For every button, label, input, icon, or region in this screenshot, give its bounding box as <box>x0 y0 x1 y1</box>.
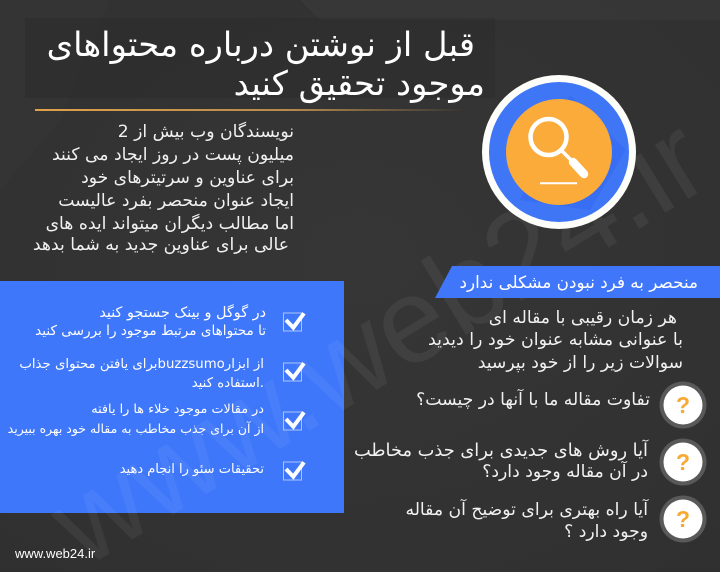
item 3 <box>8 402 306 436</box>
intro question text: هر زمان رقیبی با مقاله ای <box>489 308 677 328</box>
icon: question mark <box>660 382 706 428</box>
intro text: میلیون پست در روز ایجاد می کنند <box>52 145 294 165</box>
banner heading: منحصر به فرد نبودن مشکلی ندارد <box>460 272 698 292</box>
icon: question mark <box>660 438 706 486</box>
icon: question mark <box>660 496 706 542</box>
title: موجود تحقیق کنید <box>234 64 485 103</box>
question 3: وجود دارد ؟ <box>564 522 648 542</box>
item 4 <box>120 461 306 480</box>
item 3: از آن برای جذب مخاطب به مقاله خود بهره ببیرید <box>8 421 264 436</box>
icon: question mark: ? <box>676 506 690 532</box>
intro text: اما مطالب دیگران میتواند ایده های <box>46 214 294 234</box>
question 1: تفاوت مقاله ما با آنها در چیست؟ <box>416 390 650 410</box>
question 1 <box>416 382 706 428</box>
intro text: نویسندگان وب بیش از 2 <box>118 122 294 142</box>
divider rule <box>35 109 465 111</box>
question 3 <box>405 496 706 542</box>
item 1: تا محتواهای مرتبط موجود را بررسی کنید <box>35 323 266 339</box>
panel: checklist background <box>0 281 344 513</box>
banner heading <box>435 266 720 298</box>
question 3: آیا راه بهتری برای توضیح آن مقاله <box>405 500 648 520</box>
icon: check <box>283 362 306 382</box>
item 2 <box>19 357 306 391</box>
question 2: در آن مقاله وجود دارد؟ <box>482 462 648 482</box>
item 1 <box>35 304 306 339</box>
icon: check <box>283 312 306 332</box>
item 2: .استفاده کنید <box>192 376 264 391</box>
icon: magnifier badge <box>482 75 636 229</box>
item 3: در مقالات موجود خلاء ها را یافته <box>91 402 264 417</box>
question 2: آیا روش های جدیدی برای جذب مخاطب <box>354 440 648 461</box>
intro question text <box>428 308 683 373</box>
website footer: www.web24.ir <box>15 546 95 561</box>
checklist items <box>8 304 306 480</box>
title: قبل از نوشتن درباره محتواهای <box>47 25 475 64</box>
icon: check <box>283 411 306 430</box>
intro question text: با عنوانی مشابه عنوان خود را دیدید <box>428 330 683 350</box>
icon: question mark: ? <box>676 449 690 475</box>
intro text: برای عناوین و سرتیترهای خود <box>81 168 294 188</box>
item 2: از ابزارbuzzsumoبرای یافتن محتوای جذاب <box>19 357 264 372</box>
item 1: در گوگل و بینک جستجو کنید <box>99 305 266 321</box>
intro question text: سوالات زیر را از خود بپرسید <box>478 353 683 373</box>
item 4: تحقیقات سئو را انجام دهید <box>120 462 264 477</box>
intro text: عالی برای عناوین جدید به شما بدهد <box>33 235 289 255</box>
icon: check <box>283 461 306 480</box>
intro text: ایجاد عنوان منحصر بفرد عالیست <box>58 191 294 211</box>
icon: question mark: ? <box>676 392 690 418</box>
question 2 <box>354 438 706 486</box>
intro text <box>33 122 294 255</box>
title <box>25 18 495 98</box>
